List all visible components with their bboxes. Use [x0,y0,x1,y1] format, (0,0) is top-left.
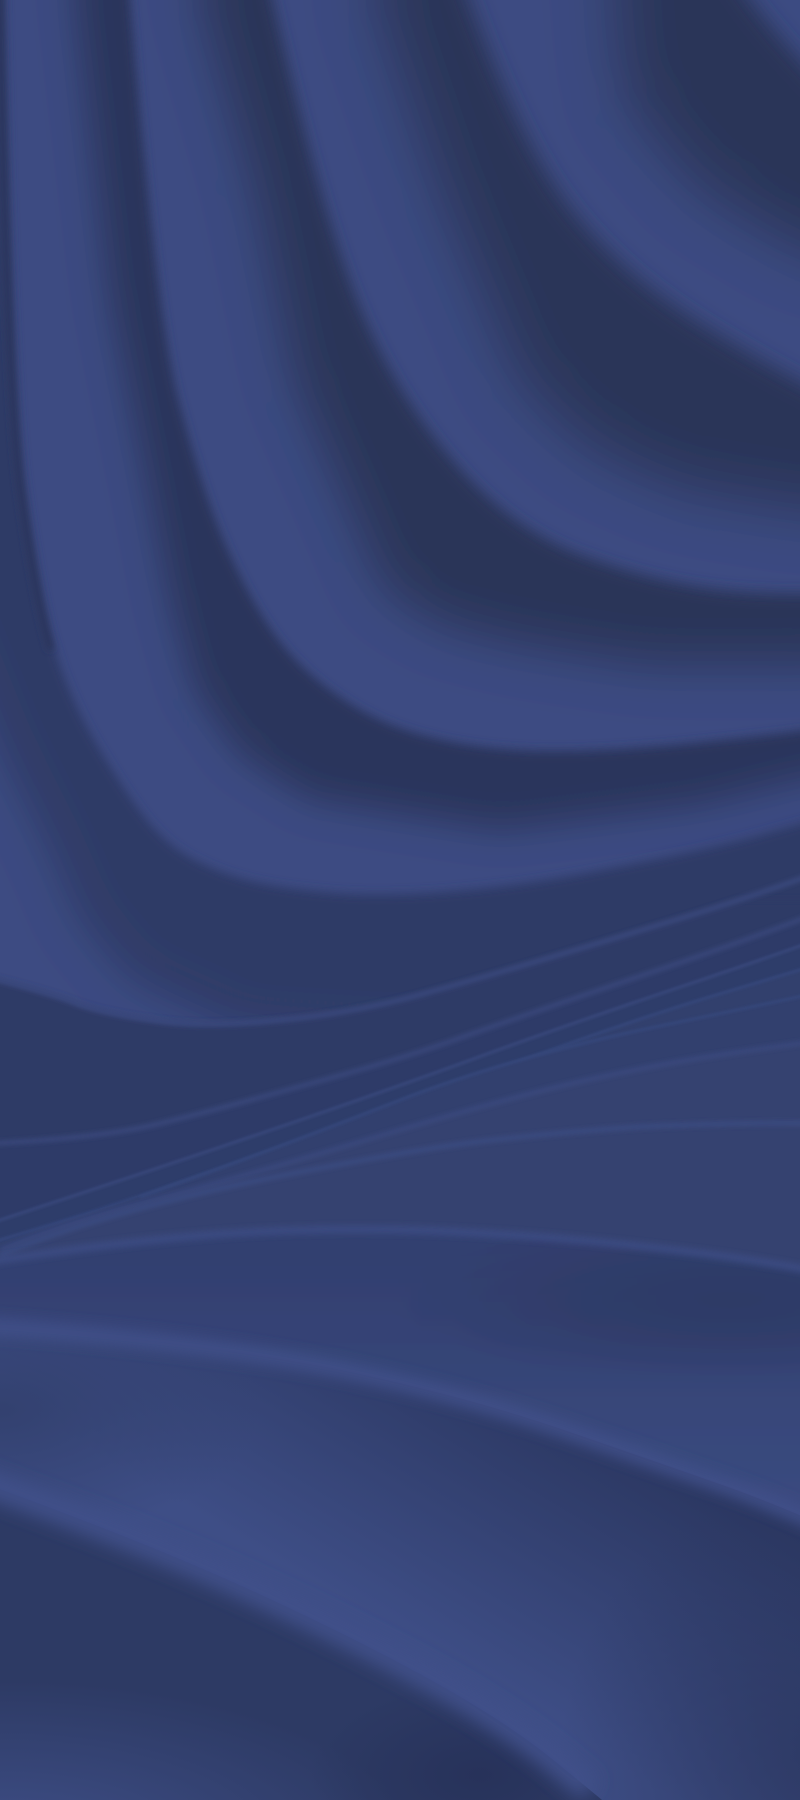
fold: large lower sweep [0,1382,800,1800]
ridge line 9 [0,1325,800,1560]
fold: lower wide band [504,1290,800,1506]
ridge line 7 [0,1123,800,1255]
fold: top-right corner [590,0,800,274]
dark crease along the far-left fold [0,0,51,650]
ridge line 4 [0,940,800,1275]
fold: converging strip 3 [326,1070,499,1132]
fold: bottom-left sweep [0,1498,602,1800]
fold: upper band 2 [180,0,800,686]
ridge line 1 [0,840,800,1024]
ridge line 8 [0,1230,800,1290]
fold: upper band 1 [352,0,800,535]
ridge line 3 [0,910,800,1255]
ridge line 6 [0,1030,800,1250]
fold: second dark band [0,880,800,1800]
fold: upper band 3 [61,0,800,842]
fold: dark middle band [0,982,500,1142]
ridge line 2 [0,880,800,1145]
fold: converging strip 4 [0,900,800,1800]
fold: converging strip 1 [0,900,800,1800]
ridge line 5 [140,975,800,1197]
fold: broad mid band [0,1000,800,1800]
fold: upper band 4 [0,6,800,1020]
fold: converging strip 2 [0,900,800,1800]
ridge line 10 [0,1450,590,1790]
